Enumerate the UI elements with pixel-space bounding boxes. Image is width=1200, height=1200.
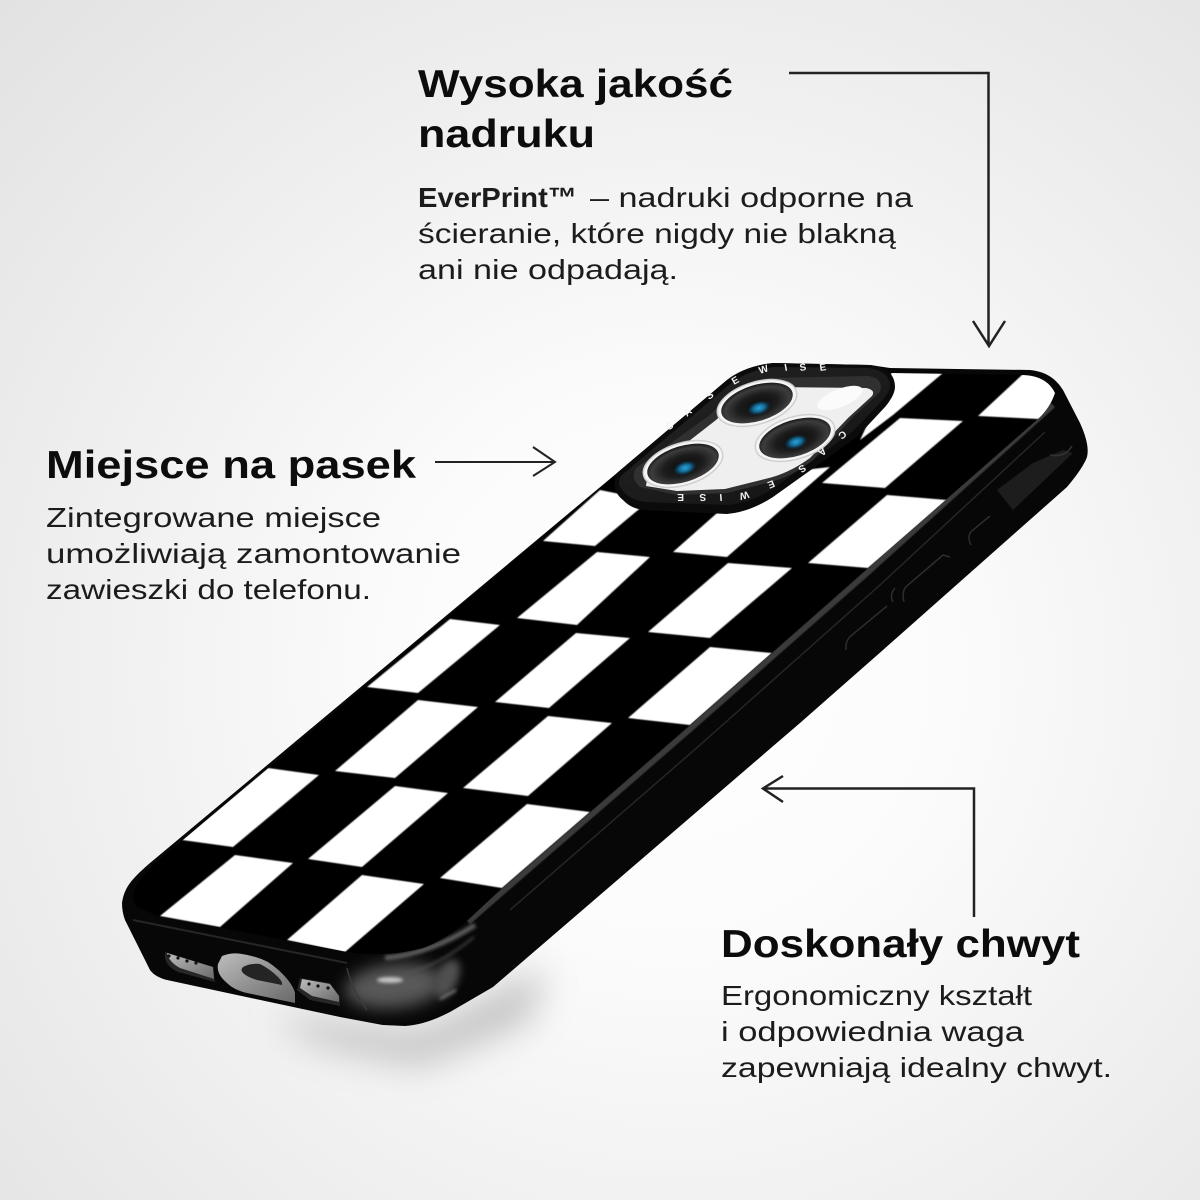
- brand lettering: S: [699, 491, 706, 502]
- body text: grip: Ergonomiczny kształt: [721, 980, 1032, 1011]
- body text: print quality: ani nie odpadają.: [418, 254, 678, 285]
- brand lettering: W: [758, 363, 770, 377]
- camera opening: [634, 376, 881, 495]
- body text: strap attachment: umożliwiają zamontowanie: [46, 538, 461, 569]
- brand lettering: A: [816, 445, 828, 458]
- heading: print quality: nadruku: [418, 113, 595, 156]
- heading: print quality: [418, 63, 733, 156]
- brand lettering: S: [799, 362, 807, 374]
- arrow: grip to case: [763, 776, 974, 917]
- brand lettering: E: [677, 491, 684, 502]
- heading: strap attachment: Miejsce na pasek: [46, 444, 416, 487]
- callout: print quality: [418, 63, 914, 285]
- brand lettering: E: [819, 362, 827, 374]
- body text: strap attachment: zawieszki do telefonu.: [46, 574, 371, 605]
- body text: grip: [721, 980, 1112, 1083]
- brand lettering: C: [664, 420, 676, 433]
- brand lettering: C: [836, 428, 848, 441]
- checkered back panel: [160, 373, 1055, 954]
- brand lettering: S: [796, 462, 808, 475]
- lens top: [712, 371, 802, 435]
- heading: print quality: Wysoka jakość: [418, 63, 733, 106]
- brand lettering: E: [730, 375, 742, 388]
- body text: strap attachment: [46, 502, 461, 605]
- brand lettering: [664, 362, 848, 502]
- body text: print quality: [418, 182, 914, 285]
- body text: strap attachment: Zintegrowane miejsce: [46, 502, 381, 533]
- brand lettering: W: [738, 488, 750, 501]
- brand lettering: A: [682, 406, 694, 419]
- bump top face: [619, 367, 890, 505]
- body text: grip: i odpowiednia waga: [721, 1016, 1025, 1047]
- phone case: [120, 360, 1088, 1026]
- lens left: [638, 432, 728, 496]
- charging port: [218, 953, 295, 1003]
- right speaker grille: [297, 978, 340, 1006]
- brand lettering: E: [765, 477, 776, 490]
- brand lettering: S: [704, 389, 716, 402]
- case silhouette: [122, 363, 1088, 1026]
- phone shadow: [270, 965, 545, 1065]
- camera bump: [615, 362, 895, 514]
- body text: grip: zapewniają idealny chwyt.: [721, 1052, 1112, 1083]
- body text: print quality: EverPrint™: [418, 182, 577, 213]
- heading: grip: Doskonały chwyt: [721, 923, 1080, 966]
- left speaker grille: [165, 952, 215, 982]
- callout: strap attachment: [46, 444, 461, 605]
- body text: print quality: – nadruki odporne na: [590, 182, 914, 213]
- arrow: print quality to case: [789, 73, 1005, 346]
- case side details: [133, 405, 1073, 1013]
- lens right: [750, 406, 840, 470]
- brand lettering: I: [719, 491, 723, 502]
- brand lettering: I: [784, 363, 788, 374]
- body text: print quality: ścieranie, które nigdy nie blakną: [418, 218, 897, 249]
- callout: grip: [721, 923, 1112, 1083]
- arrow: strap attachment to case: [435, 447, 555, 476]
- bump body: [615, 363, 895, 514]
